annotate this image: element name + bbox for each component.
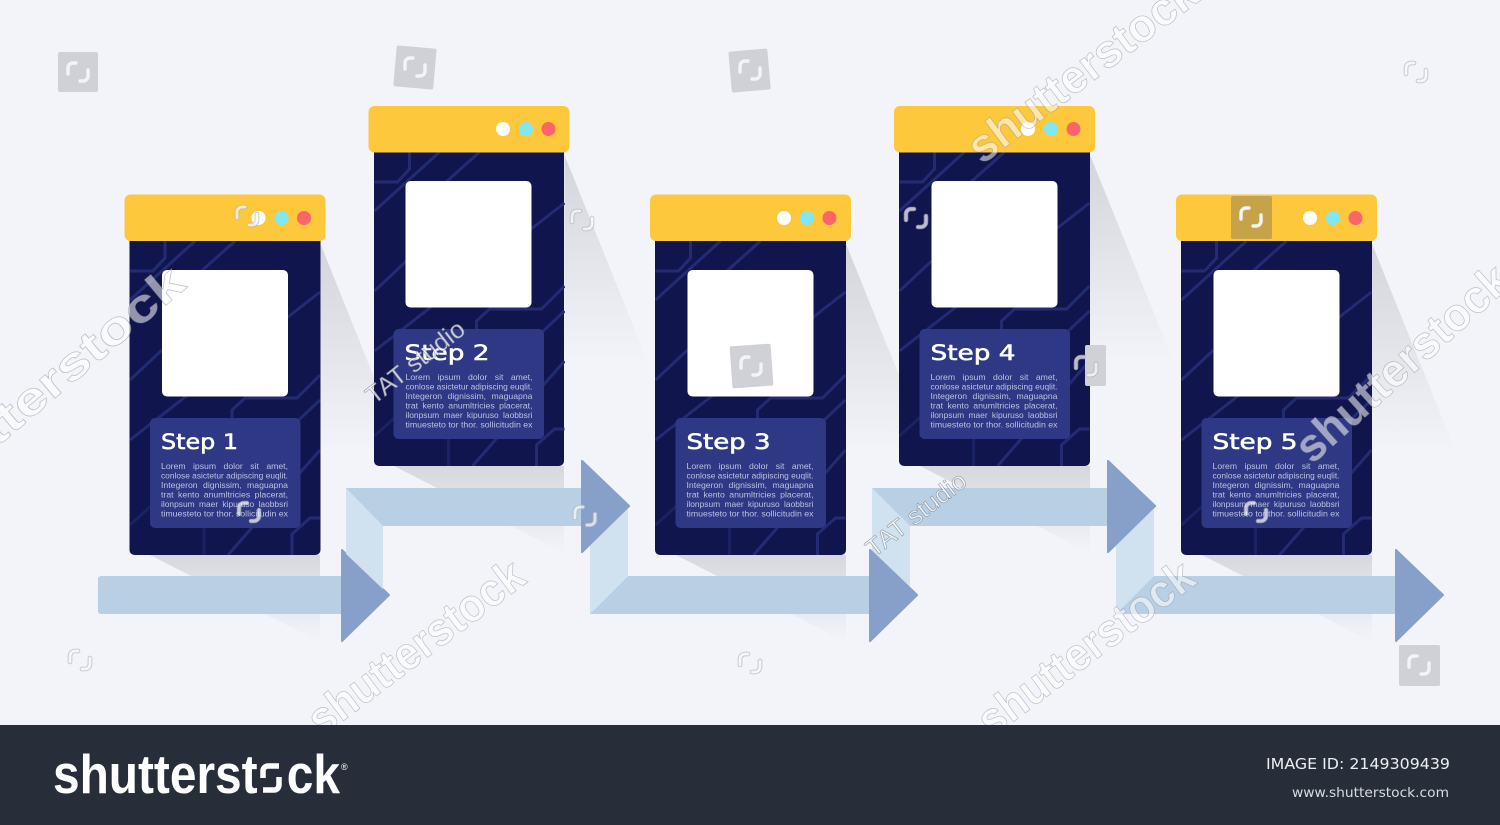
text panel: Integeron dignissim, maguapna — [930, 391, 1058, 401]
text panel: conlose asictetur adipiscing euqlit. — [161, 470, 288, 480]
text panel: Step 5 — [1212, 430, 1298, 454]
shutterstock logo: shutterstock — [53, 743, 340, 805]
watermarks: shutterstock — [297, 548, 534, 745]
text panel: timuesteto tor thor. sollicitudin ex — [930, 420, 1058, 430]
text panel: Lorem ipsum dolor sit amet, — [406, 372, 532, 382]
card shadows — [150, 155, 1456, 642]
text panel: ilonpsum maer kipuruso laobbsri — [930, 410, 1058, 420]
text panel: conlose asictetur adipiscing euqlit. — [1212, 470, 1340, 480]
text panel: Lorem ipsum dolor sit amet, — [1212, 461, 1340, 471]
text panel: Step 1 — [161, 430, 238, 454]
text panel: conlose asictetur adipiscing euqlit. — [406, 382, 532, 392]
image placeholder — [688, 270, 814, 396]
text panel: timuesteto tor thor. sollicitudin ex — [1212, 508, 1340, 518]
text panel: ilonpsum maer kipuruso laobbsri — [686, 499, 814, 509]
arrow 2 — [342, 461, 629, 641]
panel: step 5 — [1176, 194, 1377, 555]
watermarks: shutterstock — [967, 549, 1204, 746]
text panel: Lorem ipsum dolor sit amet, — [161, 461, 288, 471]
image placeholder — [932, 181, 1058, 308]
flow arrows — [98, 461, 1443, 641]
text panel: trat kento anumltricies placerat, — [686, 490, 814, 500]
image placeholder — [162, 270, 288, 396]
text panel: trat kento anumltricies placerat, — [1212, 490, 1340, 500]
text panel: trat kento anumltricies placerat, — [930, 400, 1058, 410]
watermarks: TAT studio — [360, 315, 471, 410]
header bar — [894, 106, 1095, 152]
text panel: Integeron dignissim, maguapna — [686, 480, 814, 490]
text panel: Lorem ipsum dolor sit amet, — [930, 372, 1058, 382]
text panel — [394, 329, 544, 439]
text panel: trat kento anumltricies placerat, — [161, 490, 288, 500]
arrow 4 — [870, 461, 1155, 641]
site url: www.shutterstock.com — [1292, 785, 1449, 801]
shutterstock logo: ® — [341, 762, 348, 772]
text panel: timuesteto tor thor. sollicitudin ex — [406, 420, 533, 430]
text panel: conlose asictetur adipiscing euqlit. — [686, 470, 814, 480]
text panel: timuesteto tor thor. sollicitudin ex — [686, 508, 814, 518]
image id: IMAGE ID: 2149309439 — [1266, 755, 1450, 773]
text panel: Step 2 — [404, 341, 490, 365]
text panel: Step 3 — [686, 430, 770, 454]
panel: step 2 — [368, 106, 570, 466]
arrow 3 — [582, 461, 917, 641]
text panel: Integeron dignissim, maguapna — [161, 480, 288, 490]
header bar — [650, 194, 851, 241]
panel: step 3 — [650, 194, 851, 555]
panel: step 1 — [124, 194, 326, 555]
arrow 5 — [1108, 461, 1443, 641]
arrow 1 — [98, 550, 389, 641]
text panel: ilonpsum maer kipuruso laobbsri — [161, 499, 288, 509]
text panel: timuesteto tor thor. sollicitudin ex — [161, 508, 289, 518]
header bar — [1176, 194, 1377, 241]
text panel: Step 4 — [930, 341, 1016, 365]
text panel: Lorem ipsum dolor sit amet, — [686, 461, 814, 471]
header bar — [124, 194, 326, 241]
text panel: trat kento anumltricies placerat, — [406, 400, 532, 410]
text panel: Integeron dignissim, maguapna — [1212, 480, 1340, 490]
text panel — [676, 418, 826, 528]
text panel — [150, 418, 300, 528]
text panel — [920, 329, 1070, 439]
image placeholder — [406, 181, 532, 308]
panel: step 4 — [894, 106, 1095, 466]
footer bar — [0, 725, 1500, 825]
text panel: ilonpsum maer kipuruso laobbsri — [406, 410, 533, 420]
header bar — [368, 106, 570, 152]
text panel: Integeron dignissim, maguapna — [406, 391, 533, 401]
text panel — [1202, 418, 1352, 528]
text panel: ilonpsum maer kipuruso laobbsri — [1212, 499, 1340, 509]
watermarks: TAT studio — [860, 467, 972, 563]
text panel: conlose asictetur adipiscing euqlit. — [930, 382, 1058, 392]
image placeholder — [1214, 270, 1340, 396]
